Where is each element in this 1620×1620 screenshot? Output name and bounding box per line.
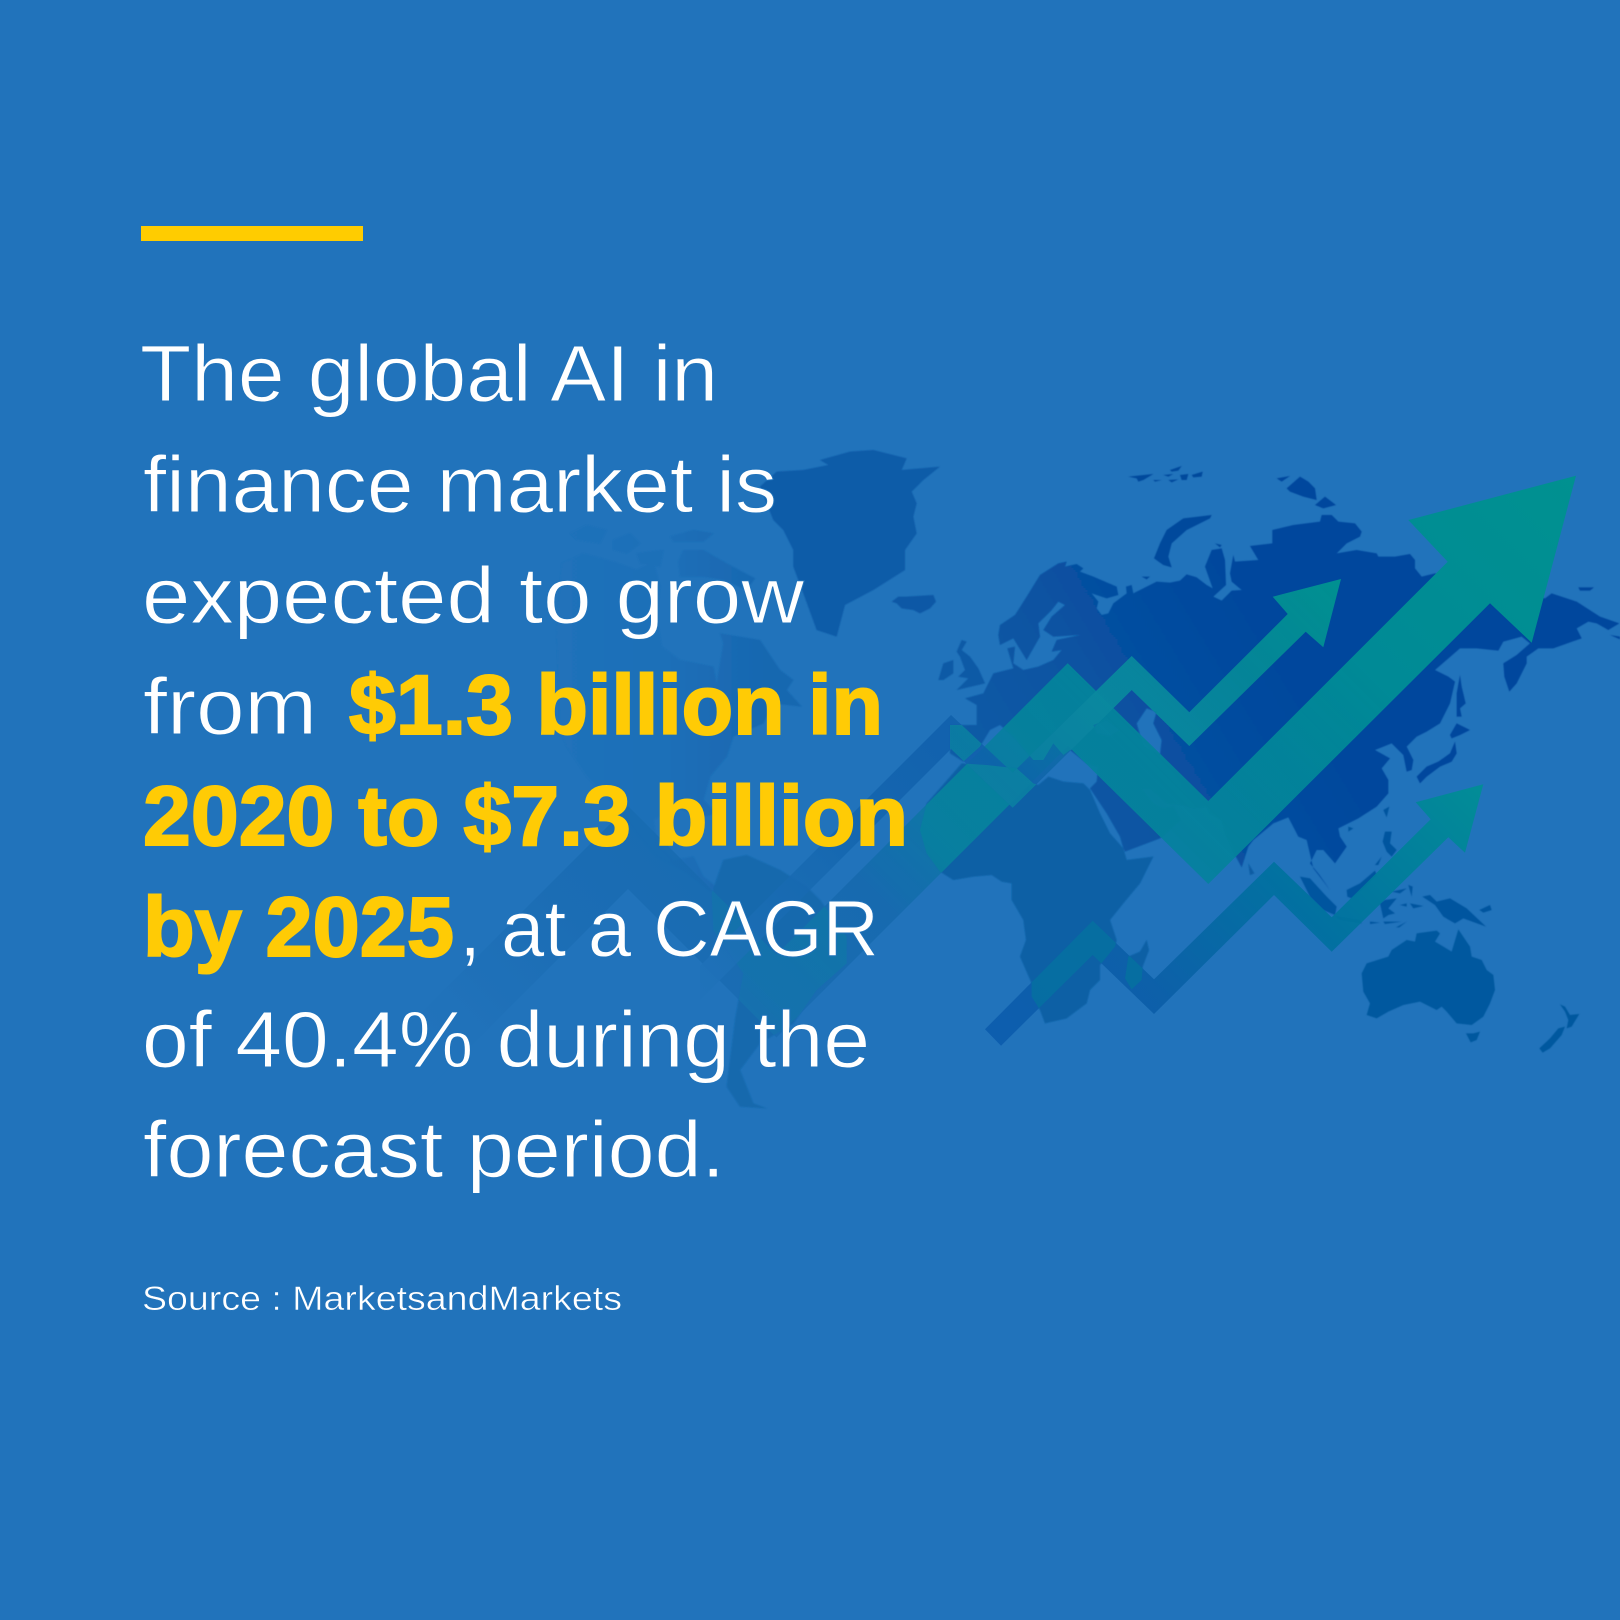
- map: Eurasia: [950, 515, 1619, 890]
- map: North America: [557, 525, 802, 892]
- map: Africa: [920, 763, 1153, 1023]
- map: Australia: [1362, 929, 1495, 1042]
- main statement text: 2020 to $7.3 billion: [143, 769, 908, 863]
- growth arrows: [584, 476, 1576, 1046]
- main statement text: $1.3 billion in: [349, 658, 883, 752]
- main statement text: ,: [459, 884, 481, 973]
- map: South America: [712, 855, 847, 1108]
- source note: Source : MarketsandMarkets: [142, 1280, 622, 1318]
- main statement text: forecast period.: [143, 1105, 725, 1194]
- arrow: middle arrow: [724, 579, 1341, 962]
- map: East Asian and Arctic islands: [1277, 476, 1620, 783]
- map: Sri Lanka: [1248, 863, 1254, 875]
- main statement text: from: [143, 662, 317, 751]
- main statement text: [140, 329, 908, 1194]
- main statement text: The global AI in: [140, 329, 718, 418]
- accent bar: [141, 226, 363, 241]
- map: Greenland and Iceland: [760, 450, 940, 637]
- map: New Zealand: [1539, 1004, 1579, 1053]
- map: British Isles, Arctic islands and Novaya Zemlya: [938, 466, 1222, 690]
- main statement text: of 40.4% during the: [142, 995, 870, 1084]
- main statement text: by 2025: [143, 880, 454, 974]
- main statement text: at a CAGR: [501, 884, 879, 973]
- map: Southeast Asia and Pacific islands: [1300, 807, 1503, 927]
- arrow: large main arrow: [584, 476, 1576, 1036]
- main statement text: expected to grow: [142, 551, 804, 640]
- main statement text: finance market is: [143, 440, 777, 529]
- map: Madagascar: [1125, 940, 1149, 989]
- arrow: bottom small arrow: [985, 784, 1483, 1046]
- world map: [557, 450, 1620, 1108]
